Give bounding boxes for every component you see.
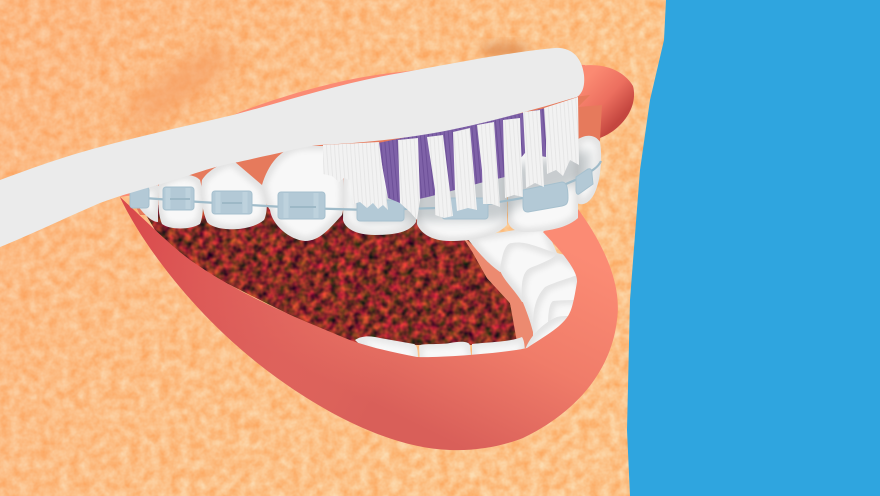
bristle tuft 6: [503, 118, 523, 198]
bracket 7: [523, 182, 568, 212]
upper lip tip: [575, 65, 634, 138]
lower tooth C: [522, 253, 592, 335]
bracket 3: [212, 191, 252, 214]
lower front tooth 2: [419, 342, 472, 364]
purple bristles: [378, 108, 546, 203]
bracket 5: [357, 200, 404, 221]
lower side teeth: [467, 225, 592, 355]
bracket 6: [442, 198, 488, 219]
bracket 8: [576, 169, 593, 194]
bristle tuft 8: [544, 97, 579, 176]
tooth 1: [130, 185, 158, 222]
tooth 7: [508, 130, 578, 232]
upper lip: [120, 64, 600, 197]
mouth interior: [146, 205, 516, 345]
lower front tooth 3: [472, 337, 525, 364]
wire: [130, 161, 601, 210]
bracket highlights: [168, 188, 316, 218]
tooth 6: [417, 150, 507, 241]
skin background: [0, 0, 680, 496]
bracket 4: [278, 192, 325, 219]
braces: [130, 161, 601, 221]
upper teeth: [130, 130, 601, 241]
tooth 8: [577, 136, 601, 204]
bristle tuft 3: [427, 135, 453, 218]
bracket 2: [163, 187, 194, 210]
blue background panel: [627, 0, 880, 496]
lower front teeth: [355, 336, 525, 364]
bristle tuft 2: [398, 138, 420, 220]
bristle tuft 5: [477, 122, 500, 207]
gum strip beside lower teeth: [462, 236, 536, 348]
lower tooth E: [548, 300, 588, 345]
white bristles: [323, 97, 579, 220]
bristle tuft 4: [453, 128, 477, 211]
gum: [130, 95, 602, 215]
lower lip: [120, 197, 618, 450]
tooth 2: [158, 175, 203, 228]
tooth 3: [201, 162, 267, 229]
tooth 4: [262, 146, 344, 241]
tooth 5: [343, 160, 416, 235]
lower tooth B: [500, 243, 585, 305]
lower front tooth 1: [355, 336, 418, 364]
lower tooth F: [525, 315, 588, 355]
toothbrush head and handle: [0, 48, 584, 247]
shadow under bristles: [355, 150, 590, 222]
bristle tuft 7: [523, 110, 544, 188]
bracket 1: [130, 187, 149, 208]
bristle tuft 1: [323, 142, 388, 210]
lower tooth A: [467, 225, 560, 272]
lower tooth D: [533, 275, 592, 345]
